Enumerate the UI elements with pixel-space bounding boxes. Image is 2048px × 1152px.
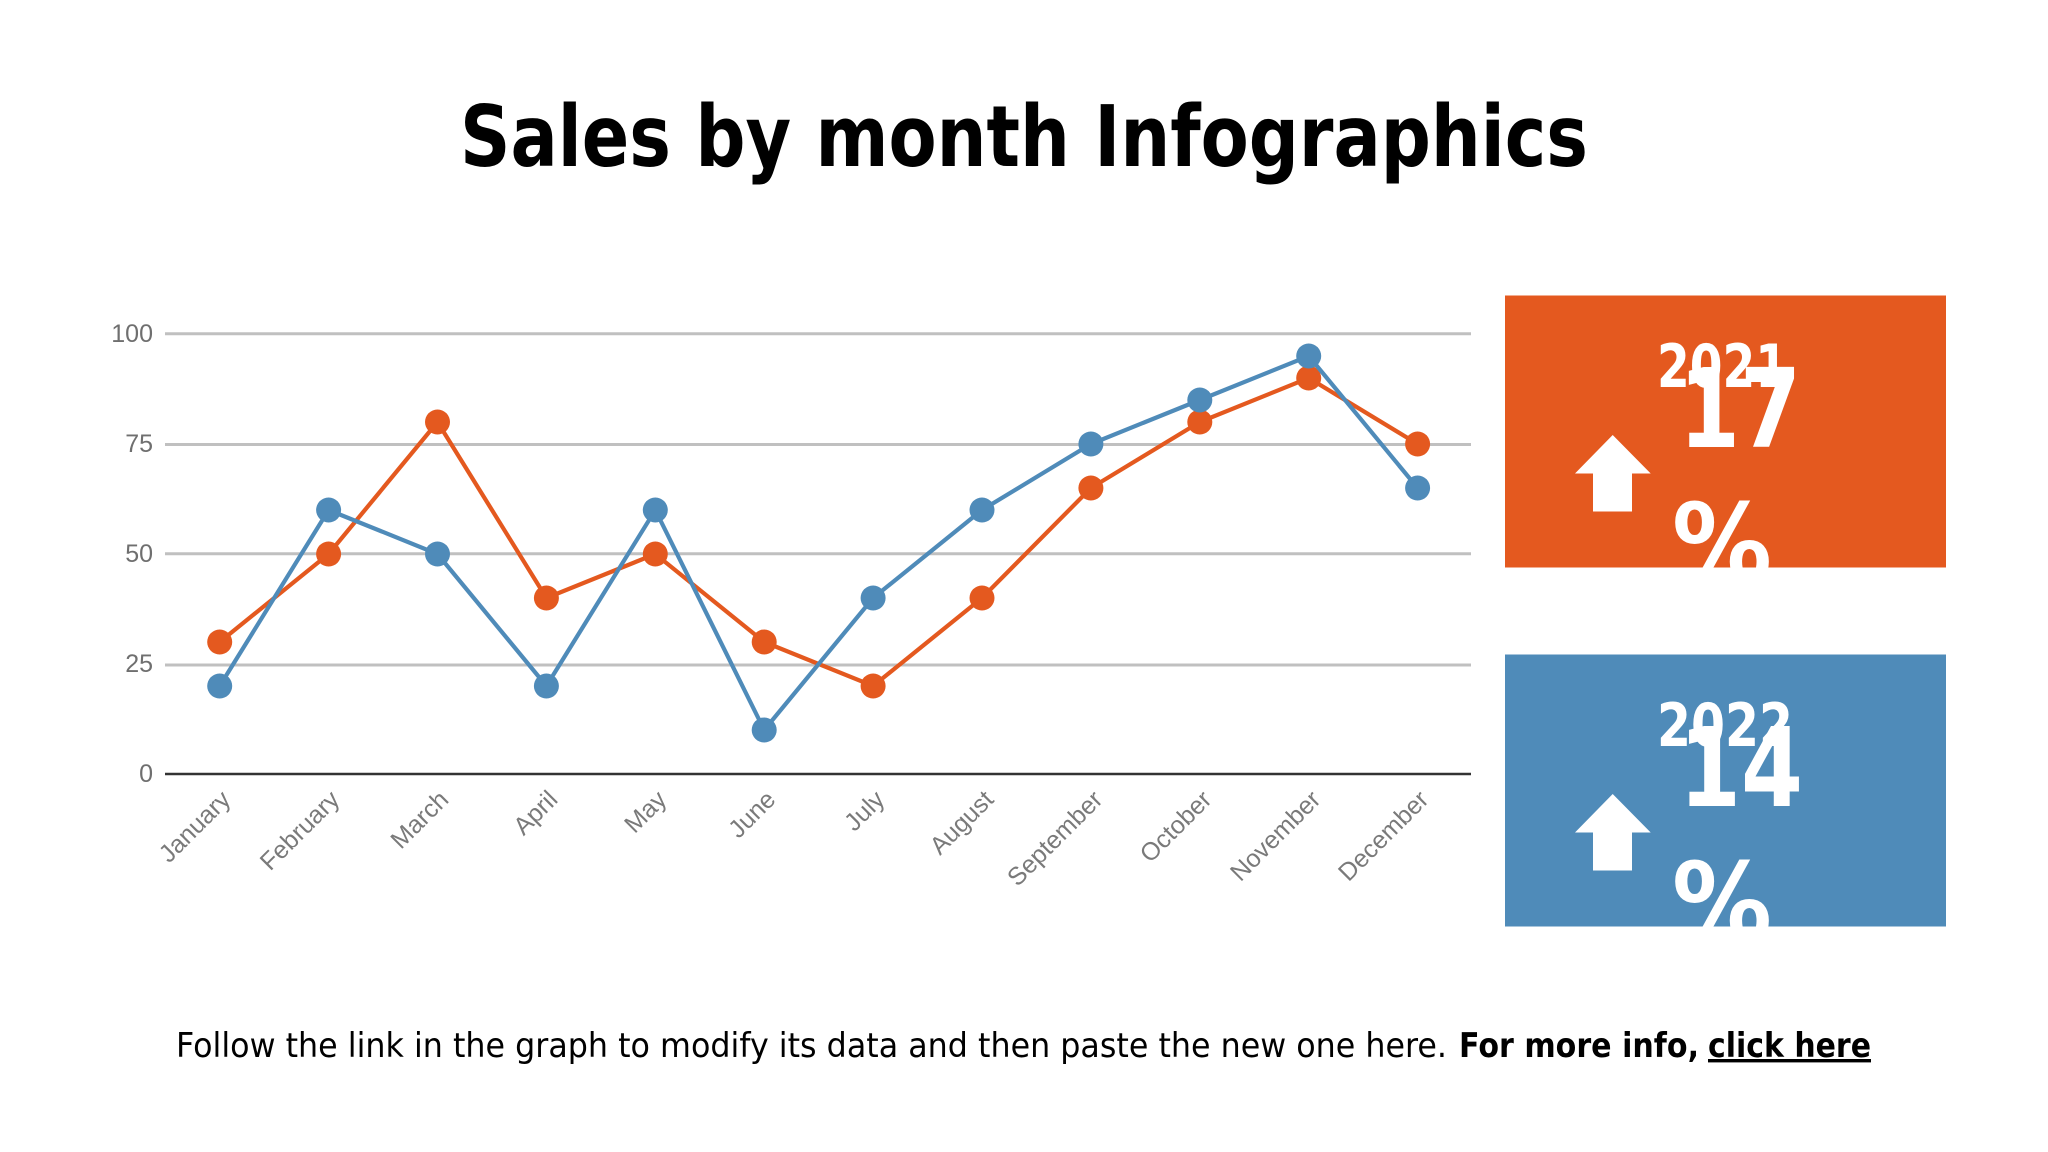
- x axis month labels: January: [154, 785, 237, 868]
- y axis labels: [111, 320, 153, 788]
- y axis labels: 75: [125, 430, 153, 458]
- panel: 2021: [1505, 296, 1946, 608]
- x axis month labels: [154, 785, 1434, 892]
- panel: 2022: [1505, 654, 1946, 967]
- series: 2022 blue line: [207, 344, 1430, 742]
- x axis month labels: July: [839, 785, 891, 837]
- value 14: 14: [1679, 704, 1803, 832]
- percent sign 2021: %: [1672, 480, 1772, 608]
- x axis month labels: October: [1135, 785, 1217, 868]
- x axis month labels: June: [723, 785, 781, 844]
- footer note: click here: [1708, 1026, 1871, 1066]
- x axis month labels: February: [255, 785, 346, 876]
- icon: up arrow 2022: [1575, 794, 1651, 870]
- y axis labels: 0: [139, 760, 153, 788]
- x axis month labels: April: [508, 785, 563, 841]
- value 17: 17: [1679, 345, 1801, 473]
- year 2021: 2021: [1657, 332, 1788, 402]
- title: Sales by month Infographics: [460, 88, 1588, 187]
- footer note: For more info,: [1459, 1026, 1699, 1066]
- year 2022: 2022: [1657, 691, 1793, 761]
- y axis labels: 25: [125, 650, 153, 678]
- y axis labels: 100: [111, 320, 153, 348]
- series: 2021 orange line: [207, 366, 1430, 698]
- x axis month labels: March: [385, 785, 454, 854]
- x axis month labels: November: [1225, 785, 1326, 887]
- x axis month labels: December: [1333, 785, 1434, 887]
- footer note: Follow the link in the graph to modify its data and then paste the new one here.: [176, 1026, 1447, 1066]
- x axis month labels: September: [1002, 785, 1108, 892]
- x axis month labels: May: [619, 785, 673, 839]
- line chart: sales by month: [111, 320, 1471, 892]
- x axis month labels: August: [924, 785, 999, 860]
- percent sign 2022: %: [1672, 839, 1772, 967]
- y axis labels: 50: [125, 540, 153, 568]
- icon: up arrow 2021: [1575, 435, 1651, 512]
